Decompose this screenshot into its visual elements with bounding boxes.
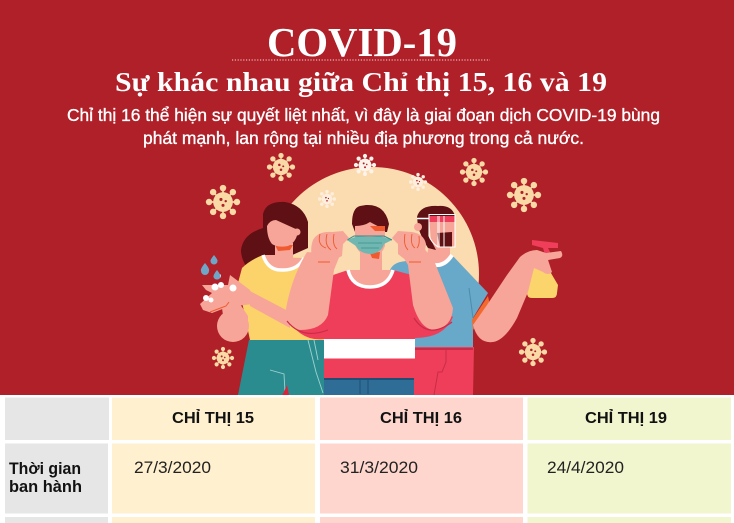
neck <box>263 243 303 270</box>
icons: floating viruses <box>206 153 547 369</box>
table row: issue date: 27/3/2020 <box>134 459 211 477</box>
table row: issue date: ban hành <box>9 478 82 496</box>
person: man with face shield and spray bottle <box>390 206 562 395</box>
table row: issue date: 31/3/2020 <box>340 459 418 477</box>
head <box>352 205 389 232</box>
face <box>267 220 298 247</box>
head with shield <box>417 206 455 250</box>
blue shirt <box>390 255 488 347</box>
illustration: peach sun circle <box>265 167 479 381</box>
right arm <box>402 248 453 330</box>
jeans <box>324 378 414 395</box>
table next row, cropped <box>5 517 731 523</box>
washing hands <box>200 275 254 313</box>
long hair <box>241 202 308 266</box>
yellow shirt <box>238 255 326 340</box>
left arm <box>285 252 340 330</box>
table header row: CHỈ THỊ 19 <box>585 408 667 427</box>
person: woman washing hands <box>200 202 326 395</box>
sleeve shading <box>287 318 452 333</box>
table row: issue date: Thời gian <box>9 460 81 478</box>
comparison table <box>5 398 731 523</box>
table row: issue date: 24/4/2020 <box>547 459 624 477</box>
red shirt <box>286 270 453 378</box>
water drops <box>201 255 221 279</box>
table header row <box>5 398 731 440</box>
raised arm <box>473 250 562 342</box>
person: central man with red shirt adjusting mask <box>285 205 453 395</box>
intro text: phát mạnh, lan rộng tại nhiều địa phương trong cả nước. <box>143 128 584 148</box>
title: COVID-19 <box>267 19 457 65</box>
white band <box>324 339 415 358</box>
red header background <box>0 0 734 395</box>
soap foam <box>203 274 236 302</box>
table header row: CHỈ THỊ 15 <box>172 408 254 427</box>
intro text <box>67 105 660 148</box>
fists <box>311 231 349 262</box>
table header row: CHỈ THỊ 16 <box>380 408 462 427</box>
table row: issue date <box>5 444 731 514</box>
spray bottle <box>527 240 558 298</box>
pants <box>414 347 474 395</box>
neck and collar <box>425 240 450 265</box>
teal trousers <box>238 340 325 395</box>
face mask <box>347 236 392 254</box>
subtitle: Sự khác nhau giữa Chỉ thị 15, 16 và 19 <box>115 67 607 97</box>
neck and collar <box>348 250 393 287</box>
arms <box>217 310 249 342</box>
intro text: Chỉ thị 16 thể hiện sự quyết liệt nhất, vì đây là giai đoạn dịch COVID-19 bùng <box>67 105 660 125</box>
